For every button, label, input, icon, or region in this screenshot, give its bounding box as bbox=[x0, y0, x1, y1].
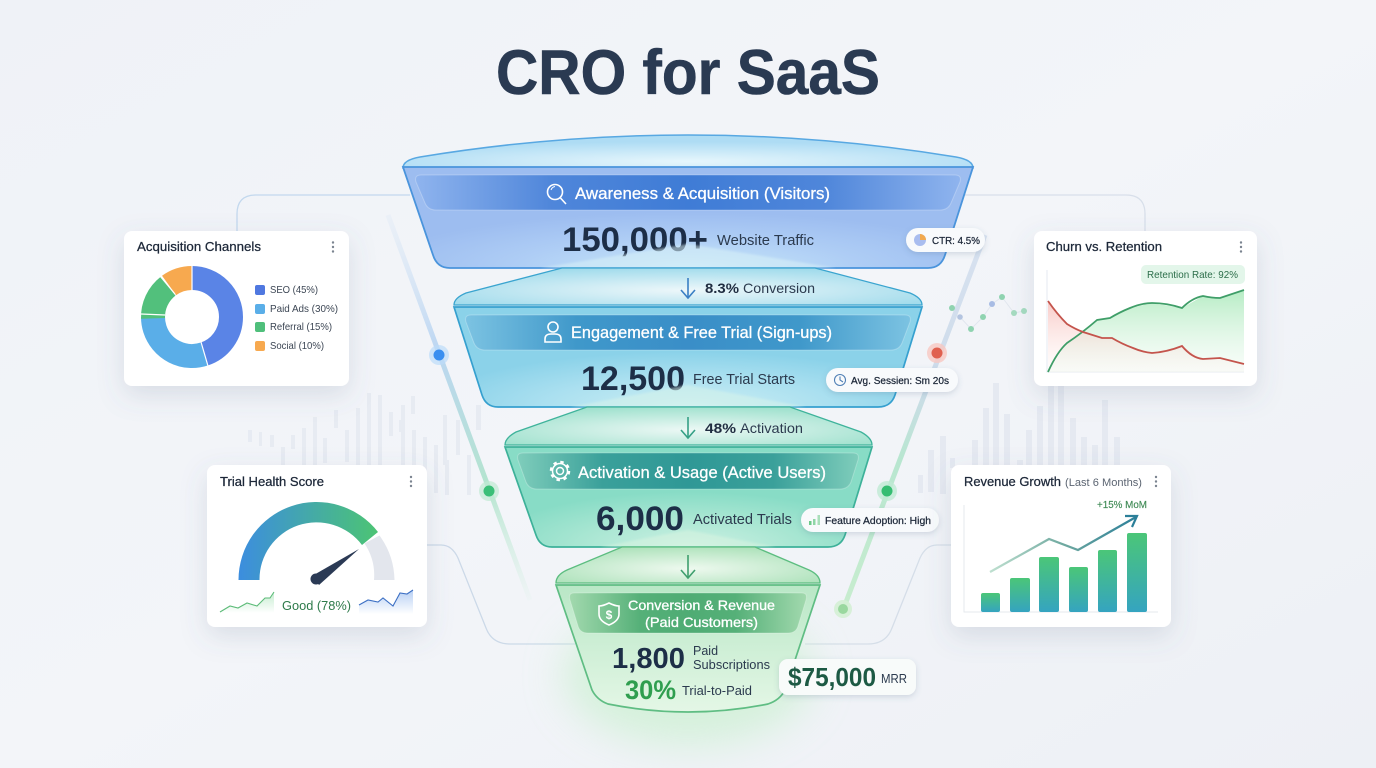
funnel stage 3: activation bbox=[505, 385, 872, 547]
stage 4 trial-to-paid: Trial-to-Paid bbox=[682, 684, 752, 698]
panel: acquisition channels: Acquisition Channels bbox=[137, 240, 261, 254]
icon: menu dots bbox=[1240, 241, 1242, 253]
sparkline green bbox=[220, 592, 274, 613]
icon: magnifier bbox=[548, 184, 566, 204]
gauge needle bbox=[310, 549, 359, 585]
stage 2 metric: Free Trial Starts bbox=[693, 372, 795, 388]
stage 2 metric: 12,500 bbox=[581, 360, 685, 398]
icon: gear bbox=[551, 462, 569, 480]
stage 3 metric bbox=[596, 500, 792, 538]
trend arrow bbox=[990, 516, 1137, 572]
legend: SEO (45%) bbox=[270, 284, 318, 296]
pill: average session: Avg. Sessien: Sm 20s bbox=[851, 375, 949, 387]
title: CRO for SaaS bbox=[496, 38, 880, 108]
funnel stage 1: awareness bbox=[403, 135, 973, 268]
legend bbox=[255, 284, 338, 352]
stage 1 metric bbox=[562, 221, 814, 259]
icon: menu dots bbox=[332, 241, 334, 253]
stage 4 header band: Conversion & Revenue bbox=[628, 597, 775, 613]
growth label: +15% MoM bbox=[1097, 499, 1147, 511]
stage 4 metric bbox=[612, 643, 770, 675]
pill: CTR bbox=[906, 228, 985, 252]
funnel stage 4: conversion bbox=[556, 530, 820, 712]
node: green right bbox=[877, 481, 897, 501]
scatter dots bbox=[949, 294, 1027, 332]
conversion label 2 bbox=[705, 420, 803, 436]
icon: menu dots bbox=[410, 476, 412, 487]
conversion label 1: Conversion bbox=[743, 280, 815, 296]
node: green left bbox=[479, 481, 499, 501]
panel: acquisition channels bbox=[124, 231, 349, 386]
line chart bbox=[1047, 270, 1244, 372]
icon: shield bbox=[599, 603, 619, 625]
legend: Paid Ads (30%) bbox=[270, 303, 338, 315]
icon: bars bbox=[809, 515, 820, 525]
stage 3 header band: Activation & Usage (Active Users) bbox=[578, 463, 826, 482]
sparkline blue bbox=[359, 590, 413, 614]
connector lines bbox=[237, 195, 1145, 644]
stage 4 trial-to-paid: 30% bbox=[625, 675, 676, 705]
node: light green bbox=[834, 600, 852, 618]
callout: retention rate: Retention Rate: 92% bbox=[1147, 269, 1238, 281]
funnel stage 2: engagement bbox=[454, 244, 922, 407]
pill: CTR: CTR: 4.5% bbox=[932, 235, 980, 247]
stage 4 metric: Paid bbox=[693, 644, 718, 658]
icon: clock bbox=[834, 374, 846, 386]
pill: feature adoption bbox=[801, 508, 939, 532]
icon: user bbox=[545, 322, 561, 342]
background bars left bbox=[248, 393, 481, 495]
panel: trial health score bbox=[207, 465, 427, 627]
panel: revenue growth bbox=[951, 465, 1171, 627]
stage 4 header band bbox=[570, 593, 806, 633]
stage 2 metric bbox=[581, 360, 795, 398]
bar chart bbox=[964, 505, 1158, 612]
glow: bottom of funnel bbox=[563, 605, 813, 745]
node: red bbox=[927, 343, 947, 363]
side rail left with nodes bbox=[388, 215, 530, 600]
panel: churn vs retention bbox=[1034, 231, 1257, 386]
panel: revenue growth: Revenue Growth bbox=[964, 475, 1061, 489]
panel: revenue growth: (Last 6 Months) bbox=[1065, 477, 1142, 489]
pill: MRR bbox=[779, 659, 916, 695]
stage 4 header band: (Paid Customers) bbox=[645, 614, 758, 630]
stage 2 header band: Engagement & Free Trial (Sign-ups) bbox=[571, 323, 832, 342]
stage 4 metric: Subscriptions bbox=[693, 658, 770, 672]
stage 2 header band bbox=[466, 315, 910, 350]
icon: menu dots bbox=[1155, 476, 1157, 487]
panel: trial health score: Trial Health Score bbox=[220, 475, 324, 489]
legend: Referral (15%) bbox=[270, 321, 332, 333]
side rail right with nodes bbox=[834, 235, 985, 618]
conversion label 1: 8.3% bbox=[705, 280, 740, 296]
stage 3 metric: 6,000 bbox=[596, 500, 684, 538]
pill: feature adoption: Feature Adoption: High bbox=[825, 515, 931, 527]
stage 4 metric: 1,800 bbox=[612, 643, 685, 675]
pill: MRR: MRR bbox=[881, 671, 907, 686]
conversion arrow 1 bbox=[681, 278, 695, 298]
conversion label 2: 48% bbox=[705, 420, 737, 436]
panel: churn vs retention: Churn vs. Retention bbox=[1046, 240, 1162, 254]
gauge value: Good (78%) bbox=[282, 598, 351, 613]
donut chart bbox=[138, 263, 246, 371]
stage 1 metric: 150,000+ bbox=[562, 221, 708, 259]
conversion label 2: Activation bbox=[740, 420, 803, 436]
callout: retention rate bbox=[1141, 265, 1245, 284]
icon: shield: $ bbox=[606, 608, 613, 622]
conversion arrow 3 bbox=[681, 555, 695, 578]
pill: average session bbox=[826, 368, 958, 392]
gauge bbox=[238, 502, 394, 585]
legend: Social (10%) bbox=[270, 340, 324, 352]
stage 3 metric: Activated Trials bbox=[693, 512, 792, 528]
stage 1 header band: Awareness & Acquisition (Visitors) bbox=[575, 184, 830, 203]
stage 1 metric: Website Traffic bbox=[717, 233, 814, 249]
stage 4 trial-to-paid bbox=[625, 675, 752, 705]
icon: pie bbox=[914, 234, 926, 246]
node: blue bbox=[429, 345, 449, 365]
conversion arrow 2 bbox=[681, 417, 695, 438]
pill: MRR: $75,000 bbox=[788, 662, 876, 692]
conversion label 1 bbox=[705, 280, 815, 296]
stage 1 header band bbox=[416, 175, 960, 210]
stage 3 header band bbox=[518, 453, 858, 489]
background bars right bbox=[918, 383, 1120, 494]
